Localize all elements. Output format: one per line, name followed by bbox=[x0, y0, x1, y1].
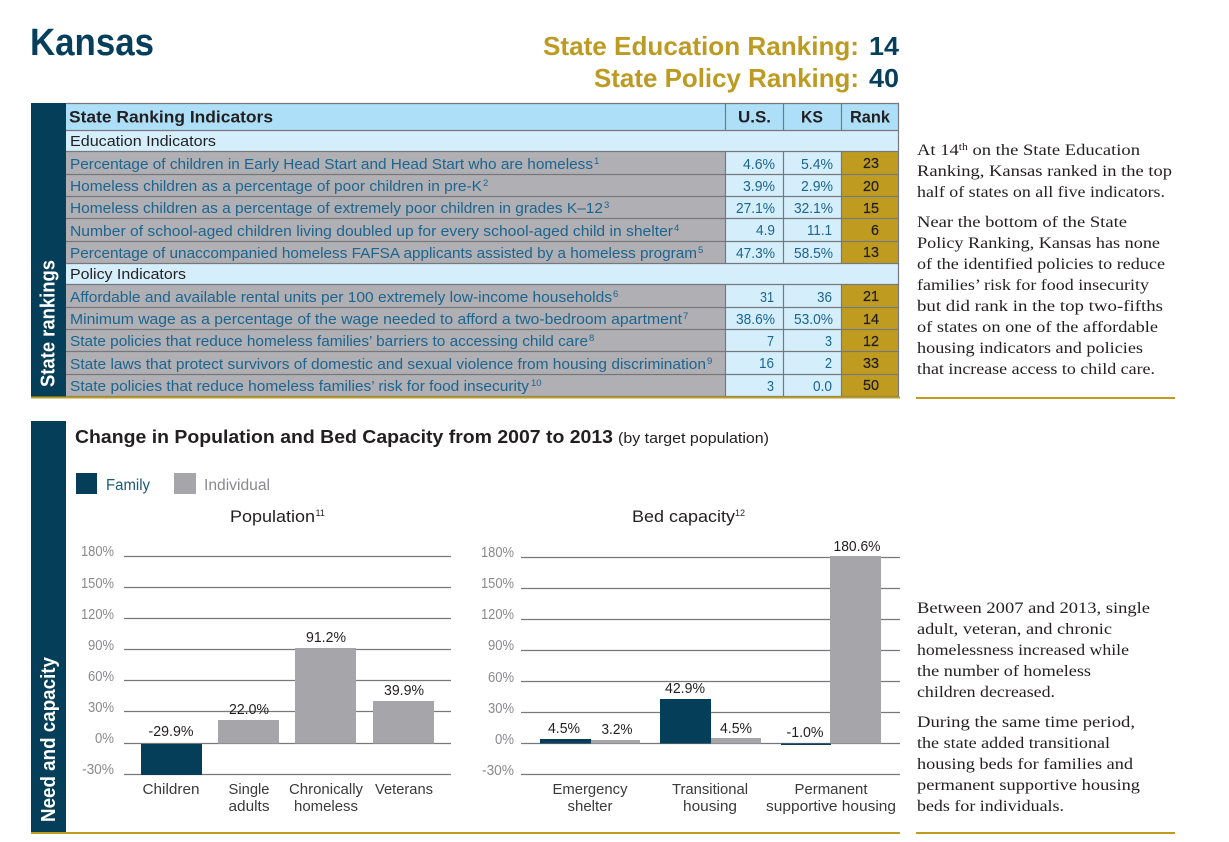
row: fafsa: Percentage of unaccompanied homeless FAFSA applicants assisted by a homeless program bbox=[70, 245, 697, 262]
bars: transitional housing bbox=[660, 680, 761, 815]
bars: transitional housing: 42.9% bbox=[665, 680, 705, 697]
sidebar: need and capacity: Need and capacity bbox=[37, 656, 60, 822]
bar chart: bed capacity bbox=[481, 507, 900, 815]
bar: single adults: adults bbox=[228, 798, 270, 815]
row: rental units bbox=[70, 288, 879, 306]
bars: permanent supportive housing bbox=[766, 538, 896, 815]
row: child care: 12 bbox=[863, 333, 879, 350]
row: early head start: 5.4% bbox=[801, 156, 833, 173]
text block: state rankings commentary: families’ risk for food insecurity bbox=[917, 277, 1149, 294]
text block: need and capacity commentary: the number of homeless bbox=[917, 663, 1091, 680]
bar chart: bed capacity: Bed capacity bbox=[632, 507, 736, 526]
text block: state rankings commentary: Policy Ranking, Kansas has none bbox=[917, 235, 1160, 252]
row: minimum wage: Minimum wage as a percentage of the wage needed to afford a two-bedroom apartment bbox=[70, 311, 683, 328]
row: housing discrimination: State laws that protect survivors of domestic and sexual violence from housing discrimination bbox=[70, 356, 706, 373]
text block: need and capacity commentary: During the same time period, bbox=[917, 714, 1135, 731]
legend bbox=[76, 473, 270, 494]
text block: state rankings commentary: At 14 bbox=[917, 142, 953, 159]
row: rental units: 21 bbox=[863, 288, 879, 305]
bar chart: population: 120% bbox=[81, 607, 114, 623]
bar chart: bed capacity: -30% bbox=[482, 763, 514, 779]
row: housing discrimination: 33 bbox=[863, 355, 879, 372]
text block: state rankings commentary bbox=[916, 142, 1175, 399]
panel: need and capacity bbox=[31, 421, 900, 834]
title: Kansas bbox=[30, 22, 154, 64]
text block: state rankings commentary: on the State Education bbox=[968, 142, 1140, 159]
row: early head start: 1 bbox=[594, 156, 599, 167]
panel: state rankings bbox=[31, 103, 900, 398]
bar chart: bed capacity: 0% bbox=[495, 732, 514, 748]
bar: single adults: Single bbox=[228, 781, 270, 798]
row: rental units: 6 bbox=[613, 289, 618, 300]
text block: state rankings commentary: of states on one of the affordable bbox=[917, 319, 1158, 336]
bars: transitional housing: 4.5% bbox=[720, 720, 752, 737]
table header: State Ranking Indicators bbox=[69, 108, 273, 126]
text block: state rankings commentary: th bbox=[959, 142, 968, 153]
row: housing discrimination: 9 bbox=[707, 356, 712, 367]
bars: emergency shelter bbox=[540, 720, 640, 815]
row: doubled up: 11.1 bbox=[807, 222, 832, 239]
state policy ranking: 40 bbox=[869, 63, 899, 93]
bars: emergency shelter: 3.2% bbox=[602, 721, 632, 738]
row: early head start: 4.6% bbox=[743, 156, 775, 173]
bars: permanent supportive housing: 180.6% bbox=[834, 538, 880, 555]
bar chart: population: Population bbox=[230, 507, 315, 526]
bar chart: population: 150% bbox=[81, 576, 114, 592]
row: food insecurity: 0.0 bbox=[813, 378, 832, 395]
bar chart: population: 90% bbox=[88, 638, 114, 654]
text block: need and capacity commentary bbox=[916, 600, 1175, 834]
text block: need and capacity commentary: adult, veteran, and chronic bbox=[917, 621, 1112, 638]
row: minimum wage: 14 bbox=[863, 311, 879, 328]
bar: single adults bbox=[218, 701, 279, 815]
bar chart: population: 180% bbox=[81, 544, 114, 560]
sidebar: state rankings bbox=[31, 103, 66, 397]
row: housing discrimination: 16 bbox=[759, 355, 774, 372]
row: child care: 7 bbox=[767, 333, 774, 350]
text block: state rankings commentary: Ranking, Kansas ranked in the top bbox=[917, 163, 1172, 180]
row: minimum wage: 53.0% bbox=[794, 311, 833, 328]
bars: emergency shelter: Emergency bbox=[552, 781, 628, 798]
row: early head start: 23 bbox=[863, 155, 879, 172]
bar: chronically homeless: homeless bbox=[294, 798, 358, 815]
bar chart: bed capacity: 30% bbox=[488, 701, 514, 717]
row: fafsa: 58.5% bbox=[794, 245, 833, 262]
row: child care bbox=[70, 333, 879, 350]
row: fafsa: 13 bbox=[863, 244, 879, 261]
bar chart: bed capacity: 12 bbox=[735, 508, 745, 518]
bar chart: bed capacity: 180% bbox=[481, 545, 514, 561]
row: housing discrimination: 2 bbox=[825, 355, 832, 372]
section: education indicators: Education Indicators bbox=[70, 133, 216, 150]
bar chart: bed capacity: 120% bbox=[481, 607, 514, 623]
row: pre-k: 2.9% bbox=[801, 178, 833, 195]
bar: chronically homeless: 91.2% bbox=[306, 629, 346, 646]
bar: veterans: 39.9% bbox=[384, 682, 424, 699]
bar chart: bed capacity: 150% bbox=[481, 576, 514, 592]
bar: chronically homeless: Chronically bbox=[289, 781, 363, 798]
text block: need and capacity commentary: homelessness increased while bbox=[917, 642, 1129, 659]
row: grades k-12: 32.1% bbox=[794, 200, 833, 217]
bars: permanent supportive housing: -1.0% bbox=[786, 724, 824, 741]
bars: permanent supportive housing: Permanent bbox=[794, 781, 868, 798]
table header: KS bbox=[801, 108, 823, 126]
chart heading: Change in Population and Bed Capacity from 2007 to 2013 bbox=[75, 427, 613, 447]
bars: emergency shelter: 4.5% bbox=[548, 720, 580, 737]
text block: state rankings commentary: that increase access to child care. bbox=[917, 361, 1155, 378]
row: early head start: Percentage of children in Early Head Start and Head Start who are homeless bbox=[70, 156, 593, 173]
bar chart: population: 30% bbox=[88, 700, 114, 716]
bar chart: bed capacity: 60% bbox=[488, 670, 514, 686]
row: grades k-12: 15 bbox=[863, 200, 879, 217]
table header bbox=[69, 108, 891, 126]
row: grades k-12: 3 bbox=[604, 200, 609, 211]
text block: need and capacity commentary: permanent supportive housing bbox=[917, 777, 1140, 794]
row: food insecurity: 10 bbox=[531, 378, 542, 389]
bar chart: population bbox=[81, 507, 451, 815]
row: food insecurity: 3 bbox=[767, 378, 774, 395]
table: state ranking indicators bbox=[31, 104, 900, 398]
row: grades k-12 bbox=[70, 200, 879, 217]
row: child care: 3 bbox=[825, 333, 832, 350]
bar chart: population: -30% bbox=[82, 762, 114, 778]
bars: transitional housing: Transitional bbox=[672, 781, 748, 798]
bar chart: bed capacity: 90% bbox=[488, 638, 514, 654]
row: food insecurity: 50 bbox=[863, 377, 879, 394]
table header: U.S. bbox=[738, 108, 771, 126]
row: pre-k: Homeless children as a percentage of poor children in pre-K bbox=[70, 178, 482, 195]
table header: Rank bbox=[850, 108, 891, 126]
row: fafsa: 5 bbox=[698, 245, 703, 256]
row: pre-k: 2 bbox=[483, 178, 488, 189]
row: doubled up: 6 bbox=[871, 222, 879, 239]
row: child care: 8 bbox=[589, 333, 594, 344]
sidebar: state rankings: State rankings bbox=[36, 260, 60, 387]
legend: Family bbox=[106, 477, 150, 494]
row: doubled up: 4.9 bbox=[756, 222, 775, 239]
row: pre-k: 3.9% bbox=[743, 178, 775, 195]
row: rental units: 36 bbox=[817, 289, 832, 306]
text block: need and capacity commentary: Between 2007 and 2013, single bbox=[917, 600, 1150, 617]
row: minimum wage: 38.6% bbox=[736, 311, 775, 328]
row: rental units: 31 bbox=[760, 289, 774, 306]
text block: state rankings commentary: of the identified policies to reduce bbox=[917, 256, 1165, 273]
row: rental units: Affordable and available rental units per 100 extremely low-income households bbox=[70, 289, 612, 306]
bar: veterans: Veterans bbox=[375, 781, 433, 798]
row: food insecurity bbox=[70, 377, 879, 395]
text block: need and capacity commentary: beds for individuals. bbox=[917, 798, 1064, 815]
section: policy indicators: Policy Indicators bbox=[70, 266, 186, 283]
bars: transitional housing: housing bbox=[683, 798, 737, 815]
bars: permanent supportive housing: supportive housing bbox=[766, 798, 896, 815]
row: early head start bbox=[70, 155, 879, 173]
text block: need and capacity commentary: the state added transitional bbox=[917, 735, 1111, 752]
state policy ranking: State Policy Ranking: bbox=[594, 63, 859, 93]
row: fafsa: 47.3% bbox=[736, 245, 775, 262]
row: doubled up: Number of school-aged children living doubled up for every school-aged child in shelter bbox=[70, 223, 673, 240]
row: grades k-12: 27.1% bbox=[736, 200, 775, 217]
row: doubled up bbox=[70, 222, 879, 240]
sidebar: need and capacity bbox=[31, 421, 66, 832]
text block: state rankings commentary: Near the bottom of the State bbox=[917, 214, 1127, 231]
state education ranking: State Education Ranking: bbox=[543, 31, 859, 61]
row: doubled up: 4 bbox=[674, 223, 679, 234]
bar: children: Children bbox=[142, 781, 200, 798]
row: food insecurity: State policies that reduce homeless families’ risk for food insecurity bbox=[70, 378, 530, 395]
bar: children: -29.9% bbox=[148, 723, 194, 740]
bars: emergency shelter: shelter bbox=[568, 798, 612, 815]
text block: state rankings commentary: half of states on all five indicators. bbox=[917, 184, 1165, 201]
text block: need and capacity commentary: children decreased. bbox=[917, 684, 1055, 701]
bar: chronically homeless bbox=[289, 629, 363, 815]
bar: children bbox=[141, 723, 202, 798]
bar chart: population: 0% bbox=[95, 731, 114, 747]
legend: Individual bbox=[204, 477, 270, 494]
bar chart: population: 60% bbox=[88, 669, 114, 685]
text block: state rankings commentary: housing indicators and policies bbox=[917, 340, 1143, 357]
chart heading: (by target population) bbox=[618, 430, 769, 447]
state education ranking: 14 bbox=[869, 31, 900, 61]
text block: state rankings commentary: but did rank in the top two-fifths bbox=[917, 298, 1163, 315]
bar: single adults: 22.0% bbox=[229, 701, 269, 718]
row: child care: State policies that reduce homeless families’ barriers to accessing child care bbox=[70, 333, 588, 350]
text block: need and capacity commentary: housing beds for families and bbox=[917, 756, 1133, 773]
row: pre-k bbox=[70, 178, 879, 195]
row: pre-k: 20 bbox=[863, 178, 879, 195]
bar chart: population: 11 bbox=[316, 508, 325, 518]
row: grades k-12: Homeless children as a percentage of extremely poor children in grades K–12 bbox=[70, 200, 603, 217]
row: minimum wage: 7 bbox=[683, 311, 688, 322]
bar: veterans bbox=[373, 682, 434, 798]
